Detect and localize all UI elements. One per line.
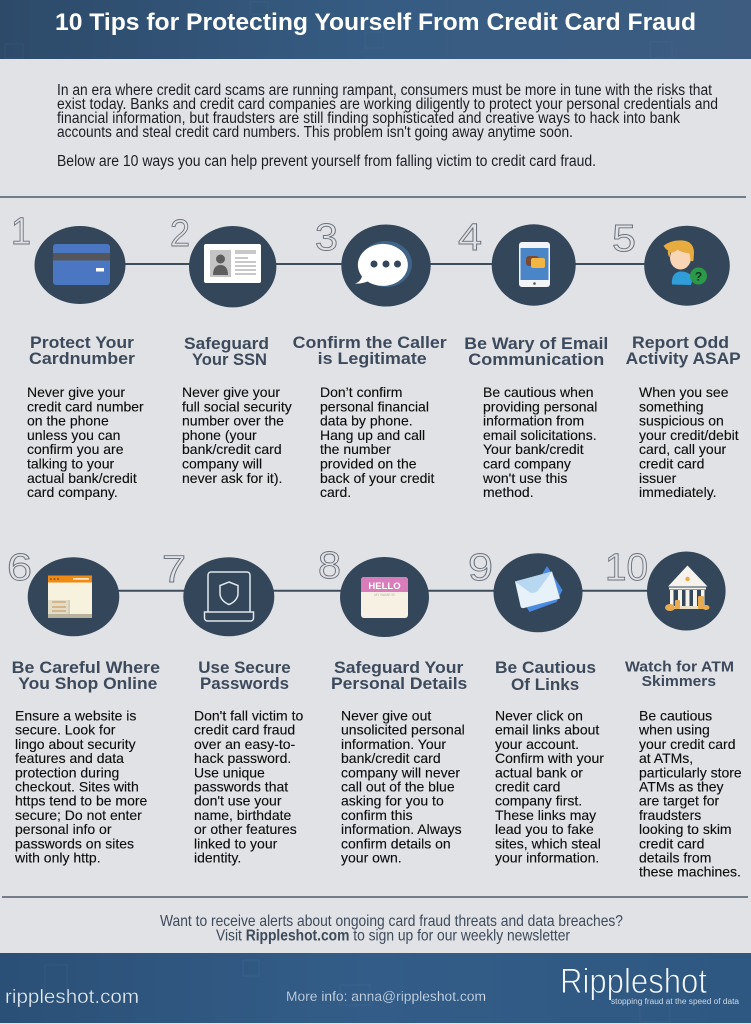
tip 1 bbox=[11, 211, 144, 500]
body 4: Be cautious when bbox=[483, 384, 594, 400]
body 5: immediately. bbox=[639, 484, 717, 500]
body 8: information. Your bbox=[341, 736, 446, 752]
intro text: Below are 10 ways you can help prevent yourself from falling victim to credit card fraud. bbox=[57, 153, 596, 170]
icon: browser window bbox=[28, 557, 119, 636]
icon: credit card bbox=[34, 226, 126, 304]
body 9: These links may bbox=[495, 807, 596, 823]
contact: More info: anna@rippleshot.com bbox=[286, 989, 486, 1004]
tip 4 bbox=[458, 217, 608, 500]
body 7: linked to your bbox=[194, 835, 278, 851]
body 1: on the phone bbox=[27, 413, 109, 429]
heading 7: Passwords bbox=[200, 675, 289, 693]
body 9 bbox=[495, 708, 604, 866]
heading 7: Use Secure bbox=[198, 659, 291, 677]
icon: laptop with shield bbox=[183, 557, 274, 636]
body 1 bbox=[27, 384, 144, 500]
intro text: financial information, but fraudsters are still finding sophisticated and creative ways to hack into bank bbox=[57, 110, 680, 127]
heading 5: Activity ASAP bbox=[626, 350, 741, 368]
heading 4 bbox=[464, 335, 608, 369]
body 7: hack password. bbox=[194, 750, 291, 766]
icon: hello name tag: MY NAME IS bbox=[374, 593, 395, 597]
body 4: providing personal bbox=[483, 398, 597, 414]
body 10: at ATMs, bbox=[639, 750, 693, 766]
body 9: your information. bbox=[495, 850, 599, 866]
number 6: 6 bbox=[7, 547, 32, 589]
heading 8 bbox=[331, 659, 467, 693]
body 5: When you see bbox=[639, 384, 729, 400]
body 6: https tend to be more bbox=[15, 793, 148, 809]
body 1: unless you can bbox=[27, 427, 120, 443]
body 4: method. bbox=[483, 484, 534, 500]
number 7: 7 bbox=[162, 549, 186, 591]
body 5: suspicious on bbox=[639, 413, 724, 429]
icon: hello name tag: HELLO bbox=[368, 581, 401, 592]
heading 1: Cardnumber bbox=[29, 350, 136, 368]
tip 2 bbox=[170, 213, 292, 486]
body 1: confirm you are bbox=[27, 441, 124, 457]
body 9: actual bank or bbox=[495, 764, 583, 780]
icon: phone with chat bbox=[492, 224, 576, 306]
body 8: confirm details on bbox=[341, 835, 451, 851]
newsletter call to action: Visit Rippleshot.com to sign up for our weekly newsletter bbox=[216, 928, 571, 945]
heading 3: is Legitimate bbox=[318, 350, 427, 368]
body 10: looking to skim bbox=[639, 821, 732, 837]
body 3: Hang up and call bbox=[320, 427, 425, 443]
body 8: unsolicited personal bbox=[341, 722, 465, 738]
body 8: confirm this bbox=[341, 807, 413, 823]
intro text: accounts and steal credit card numbers. This problem isn't going away anytime soon. bbox=[57, 124, 573, 141]
body 2: bank/credit card bbox=[182, 441, 282, 457]
body 7: or other features bbox=[194, 821, 297, 837]
tagline: stopping fraud at the speed of data bbox=[611, 997, 740, 1006]
heading 8: Safeguard Your bbox=[334, 659, 464, 677]
body 10 bbox=[638, 708, 742, 880]
body 3: personal financial bbox=[320, 398, 429, 414]
body 7: credit card fraud bbox=[194, 722, 295, 738]
body 6: passwords on sites bbox=[15, 835, 134, 851]
body 5: issuer bbox=[639, 470, 677, 486]
body 8: asking for you to bbox=[341, 793, 444, 809]
icon: id card bbox=[189, 226, 276, 307]
body 8: company will never bbox=[341, 764, 460, 780]
body 10: are target for bbox=[639, 793, 719, 809]
body 10: when using bbox=[638, 722, 710, 738]
heading 6 bbox=[12, 659, 160, 693]
body 10: fraudsters bbox=[639, 807, 701, 823]
body 6: protection during bbox=[15, 764, 119, 780]
body 3: provided on the bbox=[320, 456, 417, 472]
body 9: Never click on bbox=[495, 708, 583, 724]
body 8 bbox=[341, 708, 465, 866]
heading 1 bbox=[29, 334, 136, 368]
tip 7 bbox=[162, 549, 303, 866]
body 6: Ensure a website is bbox=[15, 708, 136, 724]
body 7: passwords that bbox=[194, 778, 288, 794]
body 5: credit card bbox=[639, 456, 704, 472]
number 3: 3 bbox=[315, 217, 338, 259]
body 6: with only http. bbox=[14, 850, 101, 866]
body 6 bbox=[14, 708, 148, 866]
body 4: Your bank/credit bbox=[483, 441, 584, 457]
website: rippleshot.com bbox=[5, 987, 139, 1008]
body 8: Never give out bbox=[341, 708, 431, 724]
body 6: secure. Look for bbox=[15, 722, 116, 738]
heading 9: Of Links bbox=[511, 676, 579, 694]
heading 2: Safeguard bbox=[184, 335, 269, 353]
tip 9 bbox=[468, 547, 604, 866]
heading 7 bbox=[198, 659, 291, 693]
heading 5: Report Odd bbox=[632, 334, 729, 352]
heading 10: Watch for ATM bbox=[625, 659, 734, 676]
body 10: Be cautious bbox=[639, 708, 712, 724]
body 3: Don’t confirm bbox=[320, 384, 402, 400]
heading 6: You Shop Online bbox=[18, 675, 157, 693]
body 7 bbox=[194, 708, 303, 866]
heading 10 bbox=[625, 659, 734, 690]
heading 1: Protect Your bbox=[30, 334, 135, 352]
intro text bbox=[57, 82, 718, 170]
body 9: Confirm with your bbox=[495, 750, 604, 766]
icon: hello name tag bbox=[340, 557, 429, 637]
body 8: bank/credit card bbox=[341, 750, 441, 766]
body 3 bbox=[320, 384, 434, 500]
body 5: something bbox=[639, 398, 704, 414]
heading 2: Your SSN bbox=[192, 351, 267, 369]
icon: bank building bbox=[647, 552, 726, 630]
body 9: lead you to fake bbox=[495, 821, 594, 837]
body 7: name, birthdate bbox=[194, 807, 291, 823]
body 4: won't use this bbox=[482, 470, 567, 486]
body 1: Never give your bbox=[27, 384, 125, 400]
body 10: details from bbox=[639, 850, 711, 866]
newsletter call to action bbox=[160, 913, 623, 945]
body 6: checkout. Sites with bbox=[15, 778, 139, 794]
body 3: the number bbox=[320, 441, 391, 457]
tip 6 bbox=[7, 547, 160, 866]
body 2: full social security bbox=[182, 398, 292, 414]
number 10: 10 bbox=[605, 547, 648, 589]
body 9: credit card bbox=[495, 778, 560, 794]
logo: Rippleshot bbox=[560, 962, 707, 1001]
heading 8: Personal Details bbox=[331, 675, 467, 693]
body 10: these machines. bbox=[639, 864, 741, 880]
body 9: email links about bbox=[495, 722, 599, 738]
newsletter call to action: Want to receive alerts about ongoing card fraud threats and data breaches? bbox=[160, 913, 623, 930]
body 5 bbox=[639, 384, 739, 500]
tip 5 bbox=[612, 218, 741, 500]
body 4: information from bbox=[483, 413, 584, 429]
body 8: information. Always bbox=[341, 821, 462, 837]
number 1: 1 bbox=[11, 211, 31, 253]
heading 2 bbox=[184, 335, 269, 369]
body 10: your credit card bbox=[639, 736, 735, 752]
header banner bbox=[0, 0, 751, 59]
body 7: Don't fall victim to bbox=[194, 708, 303, 724]
body 9: company first. bbox=[495, 793, 582, 809]
number 5: 5 bbox=[612, 218, 636, 260]
body 3: back of your credit bbox=[320, 470, 434, 486]
body 3: card. bbox=[320, 484, 351, 500]
icon: envelopes bbox=[494, 553, 582, 632]
number 8: 8 bbox=[318, 545, 341, 587]
body 4: email solicitations. bbox=[483, 427, 597, 443]
body 9: your account. bbox=[495, 736, 579, 752]
body 9: sites, which steal bbox=[495, 835, 601, 851]
heading 5 bbox=[626, 334, 741, 368]
body 7: don't use your bbox=[194, 793, 282, 809]
body 8: your own. bbox=[341, 850, 402, 866]
body 4: card company bbox=[483, 456, 571, 472]
body 8: call out of the blue bbox=[341, 778, 455, 794]
body 3: data by phone. bbox=[320, 413, 413, 429]
body 2: company will bbox=[182, 456, 262, 472]
body 6: personal info or bbox=[15, 821, 112, 837]
icon: person with question mark bbox=[644, 226, 730, 306]
heading 6: Be Careful Where bbox=[12, 659, 160, 677]
body 1: credit card number bbox=[27, 398, 144, 414]
heading 3: Confirm the Caller bbox=[293, 334, 447, 352]
body 10: credit card bbox=[639, 835, 704, 851]
heading 4: Communication bbox=[468, 351, 604, 369]
body 7: identity. bbox=[194, 850, 241, 866]
body 10: particularly store bbox=[639, 764, 742, 780]
body 6: secure; Do not enter bbox=[15, 807, 142, 823]
footer banner bbox=[0, 953, 751, 1023]
body 1: card company. bbox=[27, 484, 118, 500]
body 2: Never give your bbox=[182, 384, 280, 400]
body 5: card, call your bbox=[639, 441, 726, 457]
body 1: talking to your bbox=[27, 456, 114, 472]
title: 10 Tips for Protecting Yourself From Credit Card Fraud bbox=[55, 9, 696, 36]
body 2: number over the bbox=[182, 413, 284, 429]
number 2: 2 bbox=[170, 213, 190, 255]
body 2: phone (your bbox=[182, 427, 257, 443]
tip 8 bbox=[318, 545, 467, 866]
number 9: 9 bbox=[468, 547, 493, 589]
heading 4: Be Wary of Email bbox=[464, 335, 608, 353]
body 1: actual bank/credit bbox=[27, 470, 137, 486]
heading 9: Be Cautious bbox=[495, 659, 596, 677]
number 4: 4 bbox=[458, 217, 482, 259]
tip 10 bbox=[605, 547, 742, 880]
heading 9 bbox=[495, 659, 596, 694]
heading 3 bbox=[293, 334, 447, 368]
body 10: ATMs as they bbox=[639, 778, 724, 794]
icon: speech bubble bbox=[341, 224, 431, 306]
icon: person with question mark: ? bbox=[695, 270, 702, 284]
body 5: your credit/debit bbox=[639, 427, 739, 443]
heading 10: Skimmers bbox=[642, 673, 716, 690]
body 7: Use unique bbox=[194, 764, 265, 780]
body 2 bbox=[182, 384, 292, 486]
body 2: never ask for it). bbox=[182, 470, 282, 486]
tip 3 bbox=[293, 217, 447, 500]
body 6: lingo about security bbox=[15, 736, 136, 752]
body 7: over an easy-to- bbox=[194, 736, 295, 752]
body 6: features and data bbox=[15, 750, 124, 766]
body 4 bbox=[482, 384, 597, 500]
